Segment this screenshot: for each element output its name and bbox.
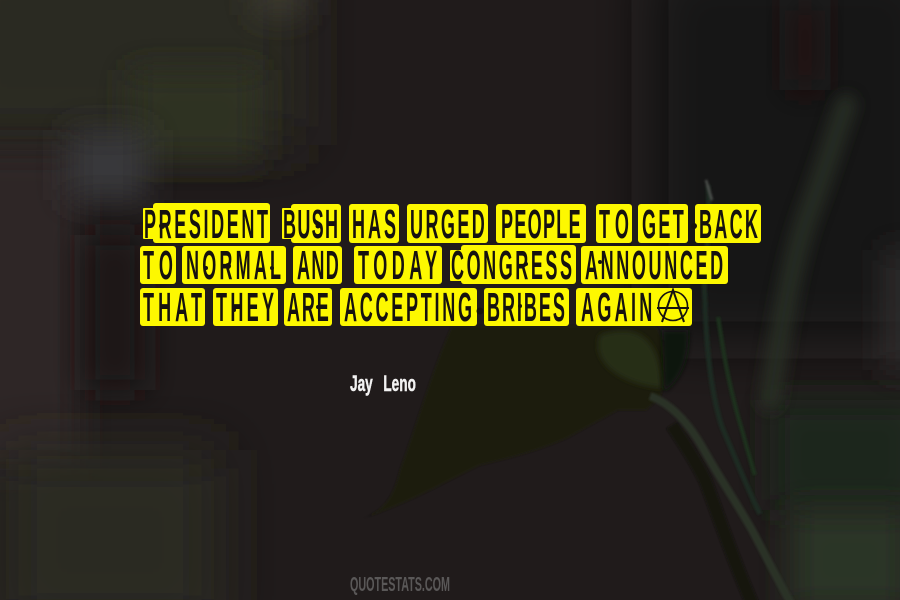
line 2 — [140, 241, 728, 288]
line 1: BUSH — [283, 200, 338, 247]
line 1: TO — [599, 200, 629, 247]
line 1: GET — [642, 200, 684, 247]
grime specks — [159, 223, 697, 314]
icon: anarchy symbol — [657, 290, 689, 322]
thin upright blade — [704, 180, 760, 514]
leaf — [360, 326, 666, 519]
line 1: HAS — [352, 200, 396, 247]
line 1: PEOPLE — [501, 200, 581, 247]
line 3: AGAIN — [581, 283, 652, 330]
line 1 — [143, 200, 761, 247]
line 3: THAT — [143, 283, 202, 330]
leaf highlight — [598, 331, 662, 388]
quote text — [140, 200, 761, 330]
line 1: PRESIDENT — [144, 200, 268, 247]
line 2: TO — [143, 241, 173, 288]
line 1: BACK — [699, 200, 758, 247]
line 2: CONGRESS — [451, 241, 572, 288]
line 3: BRIBES — [487, 283, 565, 330]
line 3 — [140, 283, 692, 330]
line 2: AND — [297, 241, 339, 288]
line 2: NORMAL — [186, 241, 281, 288]
line 2: ANNOUNCED — [585, 241, 723, 288]
line 3: ARE — [287, 283, 329, 330]
line 1: URGED — [410, 200, 485, 247]
stem — [650, 396, 795, 600]
author: Jay Leno — [350, 371, 416, 396]
line 3: ACCEPTING — [344, 283, 472, 330]
watermark: QUOTESTATS.COM — [350, 575, 450, 596]
blurred rear blade — [770, 105, 846, 400]
leaf shadow — [662, 330, 688, 392]
line 2: TODAY — [358, 241, 437, 288]
line 3: THEY — [216, 283, 274, 330]
